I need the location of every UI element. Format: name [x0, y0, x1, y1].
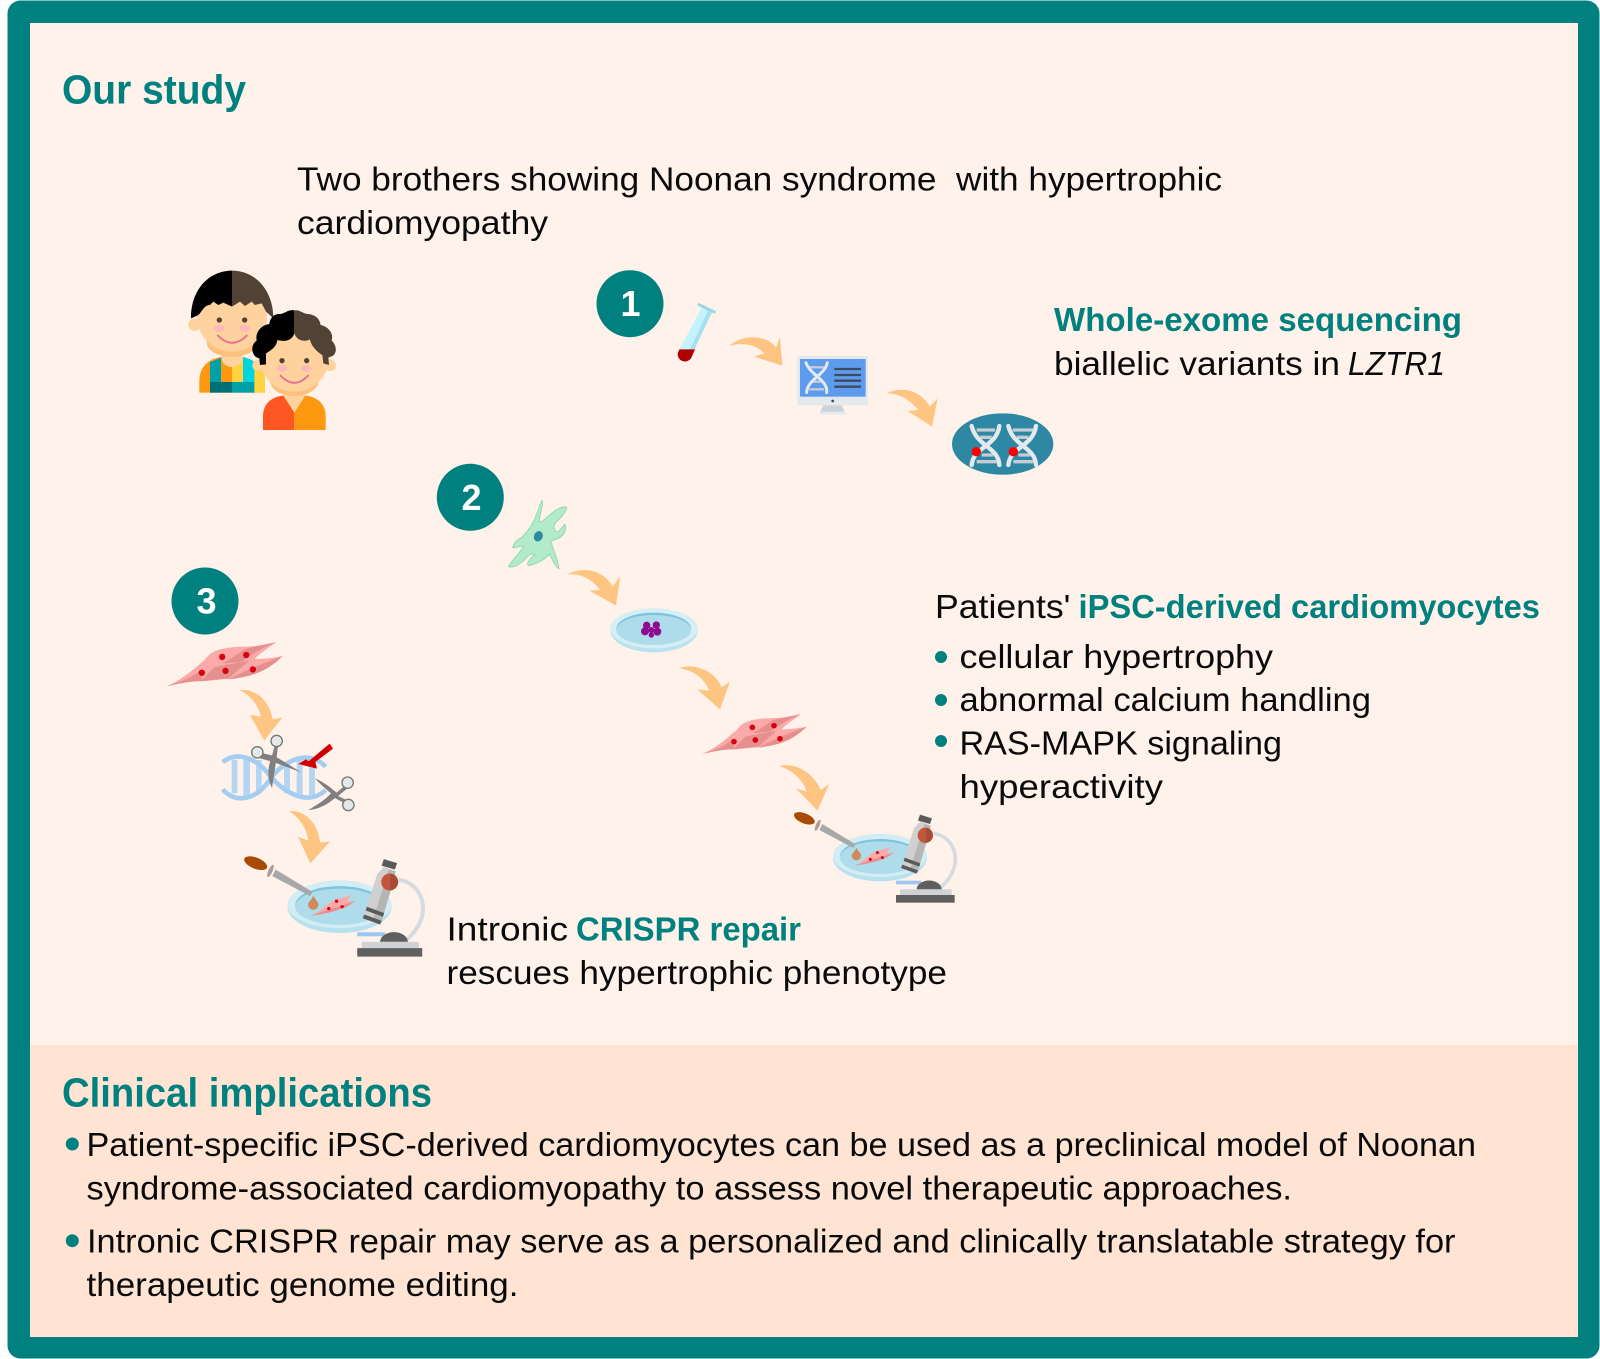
arrow — [239, 690, 282, 741]
step 1 badge: 1 — [620, 283, 641, 324]
text: iPSC-derived cardiomyocytes: RAS-MAPK signaling — [960, 726, 1282, 762]
bullet 2 — [66, 1224, 1455, 1304]
heading: clinical implications: Clinical implications — [62, 1070, 432, 1116]
text: CRISPR repair: Intronic — [446, 912, 568, 949]
arrow — [779, 765, 829, 811]
text: iPSC-derived cardiomyocytes: hyperactivity — [960, 769, 1163, 806]
text: iPSC-derived cardiomyocytes: Patients' — [935, 589, 1070, 626]
step 3 badge: 3 — [196, 580, 217, 622]
text: iPSC-derived cardiomyocytes: abnormal calcium handling — [960, 682, 1371, 719]
text: CRISPR repair: rescues hypertrophic phenotype — [446, 955, 947, 992]
step 2 badge: 2 — [461, 477, 482, 518]
arrow — [887, 390, 938, 427]
text: two brothers: cardiomyopathy — [297, 205, 548, 242]
text: iPSC-derived cardiomyocytes — [935, 589, 1540, 806]
text: whole-exome sequencing: biallelic variants in — [1054, 346, 1340, 383]
text: whole-exome sequencing: LZTR1 — [1348, 346, 1445, 383]
icon: blood tube — [678, 305, 714, 362]
text: two brothers: Two brothers showing Noonan syndrome with hypertrophic — [297, 162, 1222, 199]
icon: microscope assay — [792, 810, 955, 903]
arrow — [729, 337, 782, 366]
text: whole-exome sequencing — [1054, 302, 1462, 383]
heading: our study: Our study — [62, 66, 246, 112]
text: two brothers — [297, 162, 1222, 242]
bullet 1: syndrome-associated cardiomyopathy to assess novel therapeutic approaches. — [86, 1170, 1292, 1207]
bullet 2: Intronic CRISPR repair may serve as a personalized and clinically translatable strategy for — [87, 1224, 1456, 1261]
icon: patient cell — [508, 501, 567, 569]
icon: cardiomyocytes — [166, 642, 282, 686]
step 3 badge — [172, 568, 238, 634]
text: whole-exome sequencing: Whole-exome sequencing — [1054, 302, 1462, 339]
icon: cardiomyocytes — [702, 714, 807, 754]
step 1 badge — [596, 270, 664, 337]
arrow — [567, 570, 620, 606]
step 2 icons: cell, dish — [508, 501, 730, 709]
text: CRISPR repair — [446, 912, 947, 992]
step 1 icons: tube, monitor, DNA — [678, 305, 1053, 475]
icon: monitor with DNA — [797, 356, 868, 415]
arrow — [289, 811, 330, 863]
icon: microscope assay — [242, 853, 423, 957]
bullet 1 — [66, 1127, 1476, 1207]
step 2 badge — [437, 464, 504, 531]
icon: biallelic variants in DNA — [952, 413, 1053, 475]
icon: CRISPR scissors on DNA — [223, 735, 354, 811]
bullet 2: therapeutic genome editing. — [86, 1267, 518, 1304]
icon: two brothers — [188, 271, 336, 430]
text: CRISPR repair: CRISPR repair — [576, 912, 801, 949]
text: iPSC-derived cardiomyocytes: cellular hypertrophy — [960, 639, 1273, 676]
arrow — [678, 666, 730, 709]
panel: our study — [30, 23, 1578, 1045]
text: iPSC-derived cardiomyocytes: iPSC-derived cardiomyocytes — [1078, 589, 1540, 626]
icon: iPSC dish — [610, 608, 698, 652]
bullet 1: Patient-specific iPSC-derived cardiomyocytes can be used as a preclinical model of Noonan — [86, 1127, 1476, 1164]
panel: clinical implications — [30, 1045, 1578, 1337]
